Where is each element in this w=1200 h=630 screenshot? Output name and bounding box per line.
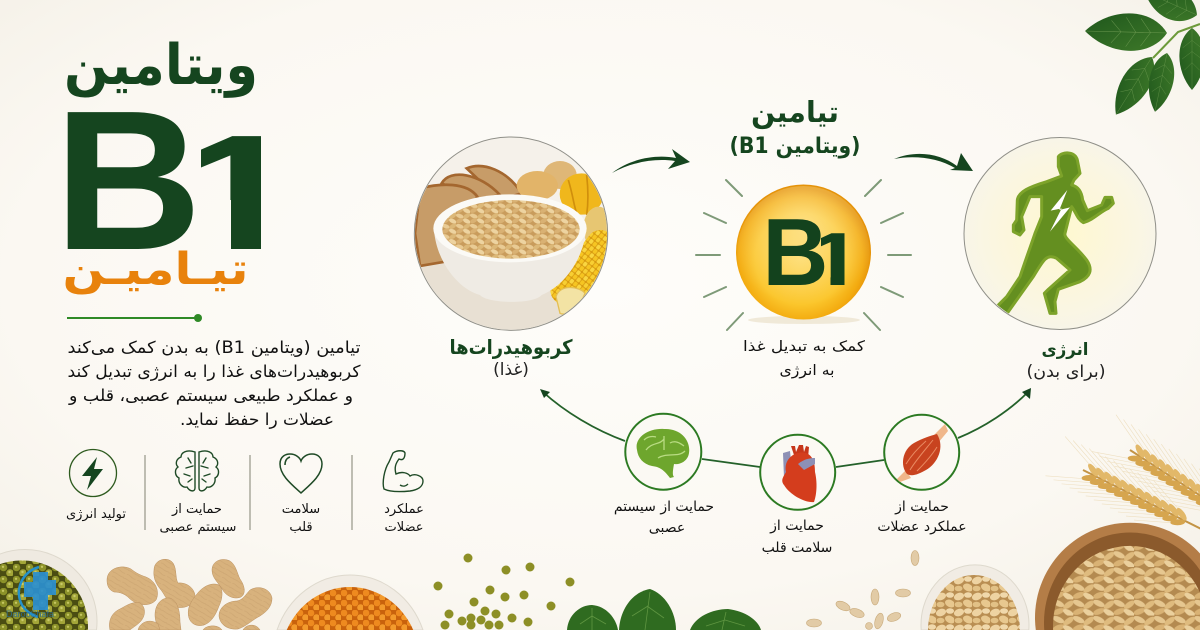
label: heart health: سلامت bbox=[282, 502, 320, 517]
label: helps convert food bbox=[743, 339, 865, 379]
label: nervous system: سیستم عصبی bbox=[160, 520, 236, 535]
label: heart health bbox=[282, 502, 320, 535]
wooden bowl of grains bbox=[1035, 523, 1200, 630]
runner silhouette bbox=[997, 153, 1113, 315]
scattered mung beans bbox=[434, 554, 574, 630]
peanuts bbox=[107, 559, 272, 630]
wheat stalks bbox=[1046, 414, 1200, 530]
label: nervous system: حمایت از bbox=[171, 502, 222, 517]
energy circle with runner bbox=[964, 138, 1156, 330]
label: energy: انرژی bbox=[1042, 340, 1088, 360]
heart circle bbox=[760, 435, 835, 510]
cycle arrow: right branch bbox=[958, 388, 1031, 438]
description paragraph: و عملکرد طبیعی سیستم عصبی، قلب و bbox=[68, 386, 353, 406]
muscle circle bbox=[884, 415, 959, 490]
label: heart health support: حمایت از bbox=[769, 518, 824, 534]
label: for the body: (برای بدن) bbox=[1026, 362, 1106, 382]
title: B1 bbox=[68, 112, 261, 249]
bowl of mung beans bbox=[0, 550, 97, 630]
label: muscle function bbox=[384, 502, 424, 535]
vitamin B1 capsule: 1 bbox=[806, 218, 865, 301]
label: muscle function: عملکرد bbox=[384, 502, 424, 517]
description paragraph: تیامین (ویتامین B1) به بدن کمک می‌کند bbox=[68, 338, 361, 358]
cycle arrow: left branch bbox=[540, 389, 625, 441]
label: energy production: تولید انرژی bbox=[66, 507, 126, 522]
label: heart health support bbox=[762, 518, 832, 556]
cycle connector: heart to muscle bbox=[836, 460, 884, 467]
icon: flexed arm bbox=[383, 451, 423, 492]
label: heart health: قلب bbox=[289, 520, 313, 535]
heading: vitamin B1: (ویتامین B1) bbox=[730, 134, 860, 159]
heading: thiamine: تیامین bbox=[751, 95, 839, 129]
label: nervous system support: عصبی bbox=[649, 520, 685, 536]
label: muscle function support bbox=[877, 499, 967, 535]
food circle: carbohydrates bbox=[413, 137, 624, 337]
label: helps convert food: کمک به تبدیل غذا bbox=[743, 339, 865, 355]
label: food: (غذا) bbox=[493, 360, 529, 380]
label: carbohydrates: کربوهیدرات‌ها bbox=[450, 335, 573, 359]
divider with dot bbox=[67, 314, 202, 322]
title: B1: 1 bbox=[173, 102, 310, 284]
icon: energy production bbox=[70, 450, 116, 496]
label: muscle function support: عملکرد عضلات bbox=[877, 519, 967, 535]
title: B1: B bbox=[54, 69, 202, 291]
bowl of red lentils bbox=[277, 575, 423, 630]
description paragraph bbox=[68, 338, 361, 430]
rays around capsule bbox=[696, 180, 911, 330]
label: nervous system bbox=[160, 502, 236, 535]
title: vitamin: ویتامین bbox=[64, 33, 258, 98]
arrow: food to vitamin bbox=[612, 149, 690, 173]
label: nervous system support bbox=[614, 499, 714, 536]
scattered seeds bbox=[806, 550, 919, 630]
label: helps convert food: به انرژی bbox=[780, 363, 834, 379]
subtitle: thiamine: تیـامیـن bbox=[62, 244, 248, 295]
bowl of rolled oats bbox=[921, 565, 1029, 630]
lightning bolt bbox=[1050, 190, 1070, 232]
label: muscle function support: حمایت از bbox=[894, 499, 949, 515]
arrow: vitamin to energy bbox=[894, 153, 973, 171]
leaves: top right branch bbox=[1085, 0, 1200, 122]
icon: brain outline bbox=[175, 451, 219, 491]
label: muscle function: عضلات bbox=[384, 520, 424, 535]
vitamin B1 capsule: B bbox=[762, 198, 828, 306]
logo watermark: DarooShafa bbox=[6, 609, 54, 619]
description paragraph: کربوهیدرات‌های غذا را به انرژی تبدیل کند bbox=[68, 362, 361, 382]
label: heart health support: سلامت قلب bbox=[762, 540, 832, 556]
cycle connector: brain to heart bbox=[702, 459, 760, 467]
label: nervous system support: حمایت از سیستم bbox=[614, 499, 714, 515]
icon: heart outline bbox=[280, 454, 322, 493]
logo watermark bbox=[6, 567, 56, 619]
description paragraph: عضلات را حفظ نماید. bbox=[180, 410, 334, 430]
spinach leaves bbox=[567, 589, 761, 630]
vitamin B1 capsule bbox=[736, 184, 871, 324]
brain circle bbox=[625, 414, 701, 490]
icon row dividers bbox=[145, 455, 352, 530]
